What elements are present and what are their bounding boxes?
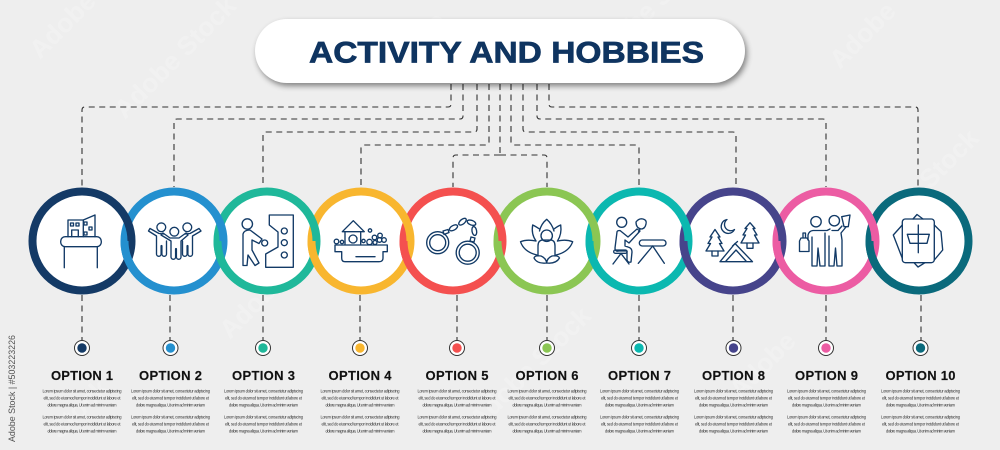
option 9 text: dolore magna aliqua. Ut enim ad minim veniam	[792, 402, 862, 408]
option 6 text: elit, sed do eiusmod tempor incididunt ut labore et	[508, 396, 586, 400]
interlocked rings	[32, 191, 969, 291]
option 1 text	[42, 368, 122, 434]
option 6 text: dolore magna aliqua. Ut enim ad minim veniam	[512, 428, 582, 434]
markers under circles	[74, 340, 928, 356]
option 4 text	[320, 368, 400, 434]
option 2 text: Lorem ipsum dolor sit amet, consectetur adipiscing	[131, 388, 211, 394]
option 9 text: dolore magna aliqua. Ut enim ad minim veniam	[792, 428, 862, 434]
option 2 text	[131, 368, 211, 434]
option 8 text	[694, 368, 774, 434]
option 10 text: Lorem ipsum dolor sit amet, consectetur adipiscing	[881, 388, 961, 394]
option 9 text	[787, 368, 867, 434]
icon: mahjong tiles	[893, 214, 943, 267]
option 1 text: OPTION 1	[51, 368, 113, 383]
option 6 text: dolore magna aliqua. Ut enim ad minim veniam	[512, 402, 582, 408]
option 1 text: dolore magna aliqua. Ut enim ad minim veniam	[48, 402, 117, 408]
option 4 text: Lorem ipsum dolor sit amet, consectetur adipiscing	[320, 388, 400, 394]
option 8 text: Lorem ipsum dolor sit amet, consectetur adipiscing	[694, 414, 774, 420]
option 3 text: elit, sed do eiusmod tempor incididunt ut labore et	[225, 422, 303, 426]
background watermarks: Stock	[43, 373, 115, 444]
option 1 text: elit, sed do eiusmod tempor incididunt ut labore et	[44, 396, 121, 400]
icon: bubble bath with toy house	[334, 221, 387, 262]
option 8 text: elit, sed do eiusmod tempor incididunt ut labore et	[695, 396, 773, 400]
option 2 text: OPTION 2	[139, 368, 202, 383]
connector lines from title to circles	[82, 84, 921, 340]
option 6 text: Lorem ipsum dolor sit amet, consectetur adipiscing	[508, 414, 587, 420]
option 1 text: elit, sed do eiusmod tempor incididunt ut labore et	[44, 422, 121, 426]
option 7 text: Lorem ipsum dolor sit amet, consectetur adipiscing	[600, 414, 680, 420]
option 5 text: Lorem ipsum dolor sit amet, consectetur adipiscing	[418, 414, 497, 420]
option 4 text: elit, sed do eiusmod tempor incididunt ut labore et	[322, 422, 399, 426]
option 5 text: dolore magna aliqua. Ut enim ad minim veniam	[422, 402, 492, 408]
option 5 text: OPTION 5	[426, 368, 488, 383]
option 2 text: dolore magna aliqua. Ut enim ad minim veniam	[136, 428, 206, 434]
option 7 text: dolore magna aliqua. Ut enim ad minim veniam	[605, 402, 675, 408]
option 10 text: elit, sed do eiusmod tempor incididunt ut labore et	[882, 396, 960, 400]
option 3 text: elit, sed do eiusmod tempor incididunt ut labore et	[225, 396, 303, 400]
icon: meditating figure on lotus	[520, 219, 573, 263]
option 3 text: Lorem ipsum dolor sit amet, consectetur adipiscing	[224, 414, 304, 420]
option 2 text: elit, sed do eiusmod tempor incididunt ut labore et	[132, 396, 210, 400]
option 7 text: elit, sed do eiusmod tempor incididunt ut labore et	[601, 422, 679, 426]
option 9 text: Lorem ipsum dolor sit amet, consectetur adipiscing	[787, 388, 867, 394]
option 6 text	[508, 368, 587, 434]
option 7 text: dolore magna aliqua. Ut enim ad minim veniam	[605, 428, 675, 434]
option 7 text: Lorem ipsum dolor sit amet, consectetur adipiscing	[600, 388, 680, 394]
option 5 text: dolore magna aliqua. Ut enim ad minim veniam	[422, 428, 492, 434]
option 9 text: Lorem ipsum dolor sit amet, consectetur adipiscing	[787, 414, 867, 420]
option 4 text: elit, sed do eiusmod tempor incididunt ut labore et	[322, 396, 399, 400]
option 8 text: OPTION 8	[702, 368, 765, 383]
option 8 text: elit, sed do eiusmod tempor incididunt ut labore et	[695, 422, 773, 426]
background watermarks: Adobe	[213, 266, 291, 344]
option 3 text: dolore magna aliqua. Ut enim ad minim veniam	[229, 428, 299, 434]
icon: person at arcade machine	[242, 215, 293, 267]
option 10 text: elit, sed do eiusmod tempor incididunt ut labore et	[882, 422, 960, 426]
option 6 text: OPTION 6	[516, 368, 578, 383]
option 10 text	[881, 368, 961, 434]
option 4 text: dolore magna aliqua. Ut enim ad minim veniam	[326, 428, 395, 434]
option 9 text: OPTION 9	[795, 368, 858, 383]
option 10 text: Lorem ipsum dolor sit amet, consectetur adipiscing	[881, 414, 961, 420]
option 10 text: OPTION 10	[886, 368, 956, 383]
option 5 text: Lorem ipsum dolor sit amet, consectetur adipiscing	[418, 388, 497, 394]
option 5 text: elit, sed do eiusmod tempor incididunt ut labore et	[418, 422, 496, 426]
background watermarks: Adobe	[723, 326, 801, 404]
option 7 text	[600, 368, 680, 434]
option 4 text: dolore magna aliqua. Ut enim ad minim veniam	[326, 402, 395, 408]
option 4 text: Lorem ipsum dolor sit amet, consectetur adipiscing	[320, 414, 400, 420]
option 4 text: OPTION 4	[328, 368, 392, 383]
option 2 text: elit, sed do eiusmod tempor incididunt ut labore et	[132, 422, 210, 426]
option 2 text: Lorem ipsum dolor sit amet, consectetur adipiscing	[131, 414, 211, 420]
option 9 text: elit, sed do eiusmod tempor incididunt ut labore et	[788, 396, 866, 400]
option 6 text: elit, sed do eiusmod tempor incididunt ut labore et	[508, 422, 586, 426]
option 1 text: dolore magna aliqua. Ut enim ad minim veniam	[48, 428, 117, 434]
option 3 text: dolore magna aliqua. Ut enim ad minim veniam	[229, 402, 299, 408]
icon: camping tent, trees and moon	[706, 220, 759, 262]
option 5 text: elit, sed do eiusmod tempor incididunt ut labore et	[418, 396, 496, 400]
option 2 text: dolore magna aliqua. Ut enim ad minim veniam	[136, 402, 206, 408]
icon: three friends with raised arms	[148, 223, 201, 259]
icon: desk with buildings	[61, 215, 101, 268]
option 10 text: dolore magna aliqua. Ut enim ad minim veniam	[886, 428, 956, 434]
option 8 text: dolore magna aliqua. Ut enim ad minim veniam	[699, 402, 769, 408]
title pill	[255, 19, 745, 83]
stock id vertical text: Adobe Stock | #503223226	[7, 335, 18, 442]
option 5 text	[418, 368, 497, 434]
option 3 text	[224, 368, 304, 434]
icon: handcuffs	[427, 217, 479, 264]
option 1 text: Lorem ipsum dolor sit amet, consectetur adipiscing	[42, 414, 122, 420]
option 8 text: dolore magna aliqua. Ut enim ad minim veniam	[699, 428, 769, 434]
option 3 text: OPTION 3	[232, 368, 295, 383]
icon: two friends with bottle and glass	[800, 215, 850, 266]
background watermarks: Stock	[913, 123, 985, 194]
option 9 text: elit, sed do eiusmod tempor incididunt ut labore et	[788, 422, 866, 426]
option 3 text: Lorem ipsum dolor sit amet, consectetur adipiscing	[224, 388, 304, 394]
option 7 text: OPTION 7	[608, 368, 671, 383]
option 6 text: Lorem ipsum dolor sit amet, consectetur adipiscing	[508, 388, 587, 394]
title text: ACTIVITY AND HOBBIES	[309, 36, 704, 70]
background watermarks: Adobe Stock	[463, 300, 597, 434]
icon: person painting at table	[613, 217, 666, 264]
background watermarks: Adobe	[373, 6, 451, 84]
option 7 text: elit, sed do eiusmod tempor incididunt ut labore et	[601, 396, 679, 400]
option 8 text: Lorem ipsum dolor sit amet, consectetur adipiscing	[694, 388, 774, 394]
option 10 text: dolore magna aliqua. Ut enim ad minim veniam	[886, 402, 956, 408]
option 1 text: Lorem ipsum dolor sit amet, consectetur adipiscing	[42, 388, 122, 394]
